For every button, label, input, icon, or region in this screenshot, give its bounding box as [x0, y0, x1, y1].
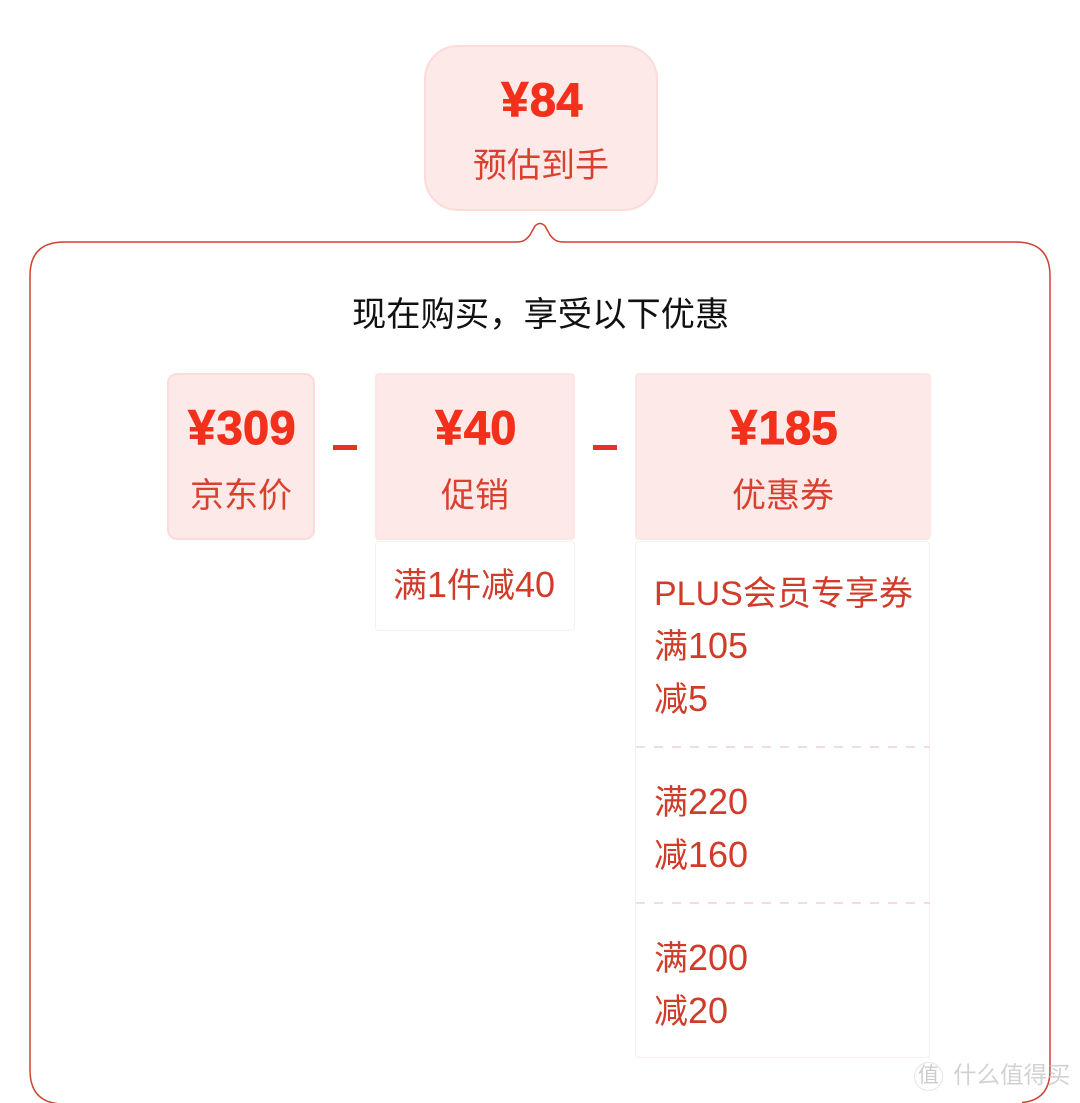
promotion amount: 40 [464, 401, 517, 454]
coupon 3 text [654, 937, 748, 1031]
watermark text: 什么值得买 [953, 1062, 1070, 1088]
coupon amount: ¥ [730, 401, 758, 455]
JD price amount: 309 [217, 401, 296, 454]
coupon 1 text: 满105 [654, 625, 748, 666]
coupon 2 text [654, 781, 748, 875]
coupon label: 优惠券 [732, 477, 834, 515]
watermark logo [914, 1062, 943, 1091]
estimated price card [424, 45, 658, 211]
coupon 1 text: PLUS会员专享券 [654, 575, 913, 613]
estimated price label: 预估到手 [473, 147, 609, 185]
coupon 1 text [654, 575, 913, 719]
minus sign [333, 445, 357, 450]
minus sign [593, 445, 617, 450]
watermark [914, 1062, 1070, 1091]
estimated price amount: 84 [530, 73, 583, 126]
JD price card [167, 373, 315, 540]
coupon 1 text: 减5 [654, 678, 708, 719]
promotion card [375, 373, 575, 540]
promotion label: 促销 [441, 477, 509, 515]
coupon 3 text: 满200 [654, 937, 748, 978]
coupon amount: 185 [759, 401, 838, 454]
panel heading: 现在购买，享受以下优惠 [352, 296, 729, 334]
promotion amount: ¥ [435, 401, 463, 455]
JD price amount: ¥ [188, 401, 216, 455]
promotion rule text: 满1件减40 [393, 564, 555, 605]
estimated price amount: ¥ [501, 73, 529, 127]
coupon 2 text: 满220 [654, 781, 748, 822]
promotion amount [434, 401, 517, 455]
coupon 2 text: 减160 [654, 834, 748, 875]
coupon 3 text: 减20 [654, 990, 728, 1031]
promotion detail [375, 541, 575, 631]
estimated price amount [500, 73, 583, 127]
watermark logo: 值 [918, 1064, 939, 1087]
coupon details [635, 541, 930, 1058]
coupon card [635, 373, 931, 540]
JD price label: 京东价 [190, 477, 292, 515]
